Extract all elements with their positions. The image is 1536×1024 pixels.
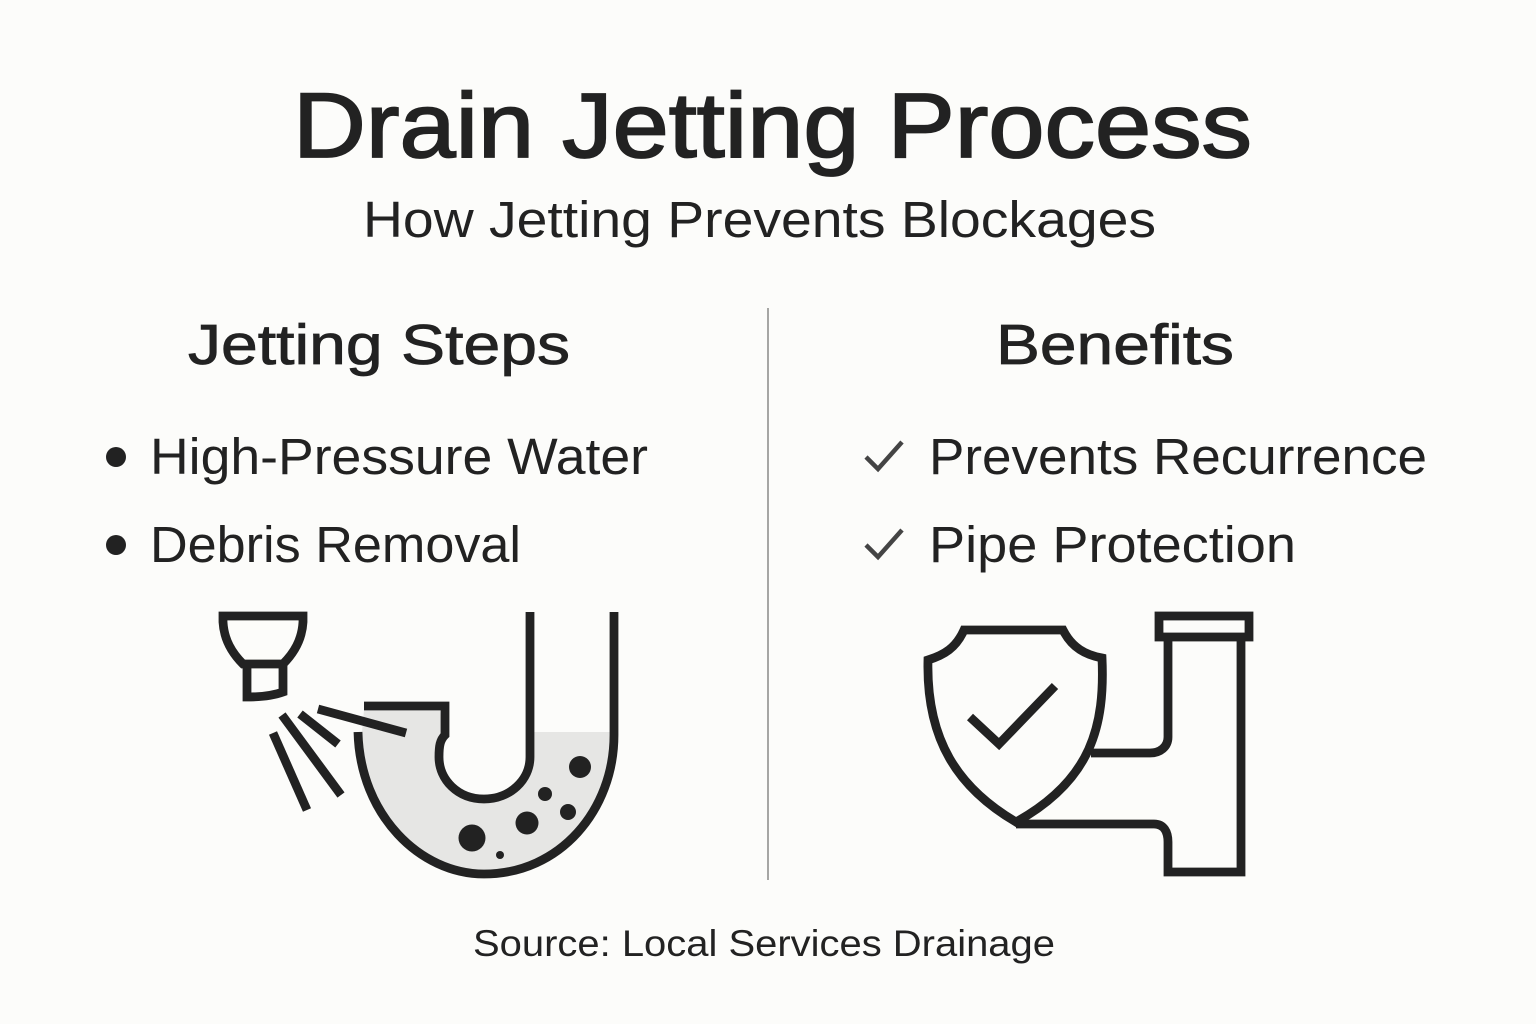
- list item: pipe protection: Pipe Protection: [929, 516, 1296, 573]
- list item: high-pressure water: High-Pressure Water: [150, 428, 648, 485]
- source note: Source: Local Services Drainage: [473, 923, 1055, 964]
- icon: nozzle spraying into a drain trap: [223, 612, 614, 874]
- title: Drain Jetting Process: [293, 75, 1252, 177]
- panel: jetting steps: [106, 313, 648, 874]
- list item: prevents recurrence: Prevents Recurrence: [929, 428, 1427, 485]
- icon: shield with check and pipe: [928, 616, 1249, 872]
- subtitle: How Jetting Prevents Blockages: [363, 191, 1156, 248]
- heading: benefits: Benefits: [996, 313, 1234, 377]
- list item: debris removal: Debris Removal: [150, 516, 521, 573]
- heading: jetting steps: Jetting Steps: [188, 313, 570, 377]
- panel: benefits: [866, 313, 1427, 872]
